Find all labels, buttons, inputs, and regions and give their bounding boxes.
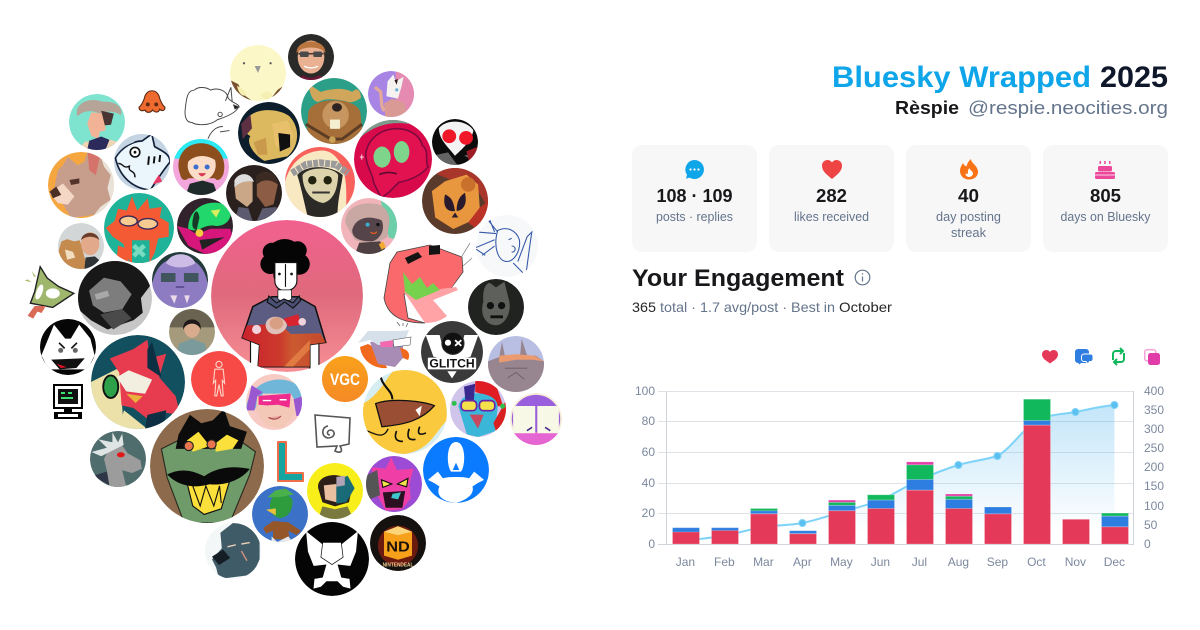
avatar: purple shark [358,322,411,368]
engagement summary: 365 [632,299,656,315]
stat value: 40 [958,186,979,206]
bar: Apr [790,531,816,544]
month labels: Feb [714,555,735,569]
bar: Jul [906,462,934,544]
avatar: man with shiba [58,223,104,269]
avatar: purple book [510,393,562,445]
bar: May [828,500,856,544]
cumulative points [799,402,1118,526]
stat label line two: streak [951,226,987,240]
avatar: green and magenta [177,198,233,254]
stat label: days on Bluesky [1060,210,1151,224]
handle: @respie.neocities.org [968,98,1168,118]
avatar: shark [114,134,170,190]
avatar: blue creature [423,437,489,503]
left axis labels [635,384,655,551]
icon: info [855,270,870,285]
avatar: sheep [341,198,397,254]
panel: streak stat [906,145,1031,252]
left axis labels: 20 [642,506,655,520]
avatar: grey lizard [90,431,146,487]
bar: Jan [672,528,700,544]
chart legend [1042,348,1160,365]
heading: Your Engagement: Your Engagement [632,265,844,292]
title: Bluesky Wrapped: Bluesky Wrapped [832,61,1091,94]
avatar: grey demon [488,336,544,392]
legend icon: reposts [1113,348,1124,365]
panel: likes stat [769,145,894,252]
icon: cake [1095,161,1115,179]
right axis labels: 300 [1144,422,1164,436]
bar: Dec [1102,513,1128,544]
bar: Nov [1062,519,1090,544]
avatar: skull with flower crown [285,147,355,217]
right axis labels [1144,384,1164,551]
chart grid [658,391,1134,544]
icon: letter L [278,442,303,481]
icon: spiral sticker [315,415,350,452]
avatar: man with glasses [288,34,334,80]
month labels: May [830,555,853,569]
avatar: pixel computer [54,385,82,419]
avatar: blue sketch [476,220,533,273]
bar: Feb [712,528,738,544]
month labels: Dec [1104,555,1125,569]
avatar: Glitch logo: GLITCH [429,358,475,371]
bar: Oct [1024,399,1050,544]
panel: posts and replies stat [632,145,757,252]
stat label: likes received [794,210,869,224]
avatar: blonde woman [238,102,300,164]
avatar: half man half robot [307,463,363,519]
left axis labels: 60 [642,445,655,459]
avatar: green crocodile [150,409,264,523]
right axis labels: 50 [1144,518,1158,532]
avatar: orange squid [139,91,165,112]
avatar: pink devil [366,456,422,512]
panel: days on Bluesky stat [1043,145,1168,252]
avatar: VGC badge [322,356,368,402]
avatar: red cat on teal [104,193,174,263]
right axis labels: 250 [1144,441,1164,455]
stat label: day posting [936,210,1001,224]
right axis labels: 400 [1144,384,1164,398]
avatar: yellow bear [230,45,286,101]
avatar: teal person [69,94,125,150]
avatar: beaver [301,78,367,144]
month labels: Jun [871,555,890,569]
avatar: dark men [226,165,282,221]
avatar: VGC badge: VGC [330,370,360,389]
avatar: dark wolf [205,523,261,579]
stat label: posts · replies [656,210,733,224]
stat value: 108 · 109 [656,186,732,206]
month labels: Sep [987,555,1008,569]
icon: heart [822,160,842,179]
avatar: blue goggles creature [450,381,506,437]
month labels: Apr [793,555,812,569]
month labels: Jan [676,555,695,569]
panel: avatar cloud [25,34,562,596]
avatar: main profile illustration [211,220,363,372]
avatar: green mask icon [25,267,74,319]
stat value: 805 [1090,186,1121,206]
left axis labels: 0 [648,537,655,551]
engagement summary [632,299,892,315]
right axis labels: 150 [1144,479,1164,493]
right axis labels: 200 [1144,460,1164,474]
month labels: Mar [753,555,774,569]
bar: Sep [984,507,1012,544]
right axis labels: 100 [1144,499,1164,513]
avatar: red glasses [432,119,478,165]
avatar: red stick figure [191,351,247,407]
bar: Jun [868,495,894,544]
avatar: green duck [252,486,308,542]
avatar: fox [48,152,114,218]
avatar: purple creature [152,252,208,308]
avatar: T-rex [384,243,472,323]
avatar: pink mask girl [246,374,302,430]
engagement summary: total · 1.7 avg/post · Best in [660,299,835,315]
avatar: Glitch logo [421,321,483,383]
engagement summary: October [839,299,892,315]
month labels [676,555,1125,569]
left axis labels: 80 [642,414,655,428]
avatar: ND cube [370,515,426,571]
icon: chat bubble [685,160,704,179]
avatar: ND cube: ND [386,539,410,555]
stat value: 282 [816,186,847,206]
avatar: red creature [354,120,432,198]
display name: Rèspie [895,98,959,118]
cumulative area [685,405,1114,544]
avatar: brown hair girl [173,139,229,195]
avatar: dark skull [468,279,524,335]
cumulative line [685,405,1114,540]
left axis labels: 100 [635,384,655,398]
avatar: dark gray portrait [78,261,152,335]
avatar: pink mask [368,71,414,117]
right axis labels: 0 [1144,537,1151,551]
avatar: white robot mask [295,522,369,596]
title: year: 2025 [1100,61,1168,94]
combo chart: engagement by month [635,384,1164,569]
avatar: sketch dog [185,87,239,139]
left axis labels: 40 [642,476,655,490]
legend icon: replies [1075,349,1093,364]
avatar: orange gears [422,168,488,234]
avatar: red dragon [91,335,185,429]
avatar: black and white cat [40,319,96,375]
month labels: Nov [1065,555,1086,569]
icon: flame [960,159,978,180]
bar: Aug [946,494,972,544]
month labels: Aug [948,555,969,569]
stacked bars [672,399,1128,544]
bar: Mar [750,508,778,544]
avatar: woman in photo [169,309,215,355]
legend icon: quotes [1145,350,1160,365]
legend icon: likes [1042,350,1058,364]
avatar: ND cube: NINTENDEAL [383,563,414,569]
month labels: Jul [912,555,927,569]
avatar: yellow lizard [363,370,447,454]
right axis labels: 350 [1144,403,1164,417]
month labels: Oct [1027,555,1046,569]
